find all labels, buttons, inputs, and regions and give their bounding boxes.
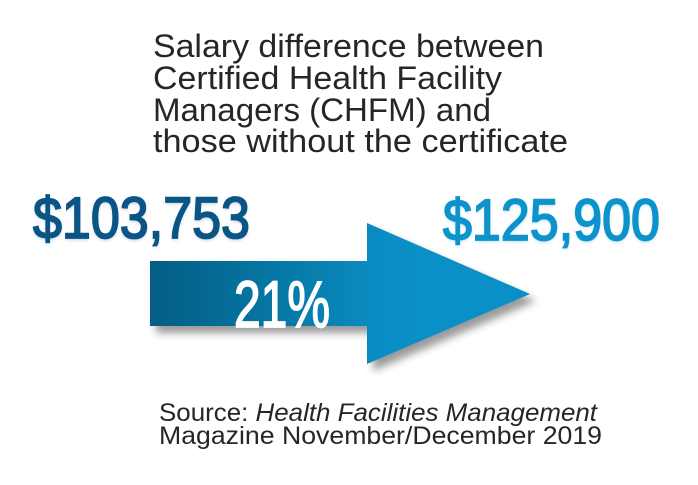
title: Certified Health Facility: [153, 60, 502, 96]
certified salary: $125,900: [443, 188, 660, 253]
title: Salary difference between: [153, 28, 544, 64]
starting salary: $103,753: [33, 188, 250, 253]
source: Source: Health Facilities Management: [159, 399, 598, 427]
title: those without the certificate: [153, 123, 568, 159]
source: Magazine November/December 2019: [159, 422, 602, 450]
title: [153, 28, 568, 159]
source: [159, 399, 602, 450]
arrow: [150, 223, 536, 371]
starting salary: $103,753: [33, 186, 250, 251]
certified salary: $125,900: [443, 190, 660, 255]
percentage label: 21%: [234, 267, 330, 341]
title: Managers (CHFM) and: [153, 92, 491, 128]
